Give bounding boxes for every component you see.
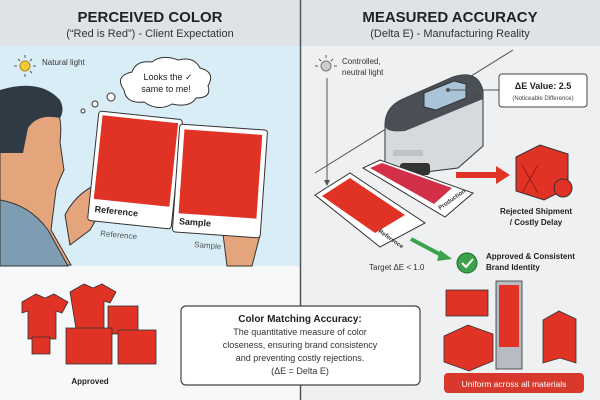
backgrounds bbox=[0, 0, 300, 400]
spectrophotometer bbox=[385, 75, 483, 176]
thought bubble: Looks the ✓ bbox=[143, 72, 193, 82]
card: sample bbox=[172, 124, 268, 238]
approved products bbox=[22, 284, 156, 386]
icon: controlled light: neutral light bbox=[342, 68, 384, 77]
arrow: light down bbox=[324, 78, 330, 186]
callout: delta E value bbox=[446, 74, 587, 107]
person bbox=[0, 86, 260, 266]
card: production sample bbox=[363, 160, 473, 217]
text: Sample bbox=[194, 240, 222, 251]
arrow: red to rejected bbox=[456, 166, 510, 184]
heading: perceived color bbox=[66, 9, 234, 40]
approved brand identity: Target ΔE < 1.0 bbox=[369, 263, 425, 272]
approved brand identity bbox=[369, 252, 575, 273]
thought bubble: same to me! bbox=[141, 84, 191, 94]
card: reference: Reference bbox=[94, 204, 139, 219]
card: reference bbox=[87, 111, 183, 229]
card: reference standard: Reference bbox=[377, 229, 405, 251]
rejected shipment bbox=[500, 145, 572, 227]
label: uniform across all materials: Uniform across all materials bbox=[462, 379, 566, 389]
callout: color matching accuracy: The quantitative measure of color bbox=[233, 327, 367, 337]
callout: color matching accuracy: Color Matching Accuracy: bbox=[238, 314, 362, 325]
approved products: Approved bbox=[71, 377, 109, 386]
brand materials bbox=[444, 281, 576, 371]
heading: measured accuracy: (Delta E) - Manufacturing Reality bbox=[370, 28, 530, 40]
card: production sample: Production bbox=[438, 188, 467, 212]
icon: controlled light bbox=[315, 55, 384, 77]
callout: color matching accuracy bbox=[181, 306, 420, 385]
rejected shipment: Rejected Shipment bbox=[500, 207, 572, 216]
heading: perceived color: (“Red is Red”) - Client Expectation bbox=[66, 28, 234, 40]
icon: sun natural light bbox=[14, 55, 85, 77]
heading: measured accuracy: MEASURED ACCURACY bbox=[362, 9, 538, 26]
label: uniform across all materials bbox=[444, 373, 584, 393]
icon: sun natural light: Natural light bbox=[42, 58, 85, 67]
icon: controlled light: Controlled, bbox=[342, 57, 381, 66]
callout: delta E value: ΔE Value: 2.5 bbox=[515, 81, 571, 91]
heading: measured accuracy bbox=[362, 9, 538, 40]
thought bubble bbox=[81, 57, 211, 113]
rejected shipment: / Costly Delay bbox=[510, 218, 563, 227]
heading: perceived color: PERCEIVED COLOR bbox=[77, 9, 223, 26]
card: sample: Sample bbox=[179, 216, 211, 228]
callout: color matching accuracy: closeness, ensuring brand consistency bbox=[223, 340, 378, 350]
callout: color matching accuracy: and preventing costly rejections. bbox=[236, 353, 364, 363]
callout: color matching accuracy: (ΔE = Delta E) bbox=[271, 366, 329, 376]
arrow: green to approved bbox=[411, 239, 452, 261]
approved brand identity: Approved & Consistent bbox=[486, 252, 575, 261]
callout: delta E value: (Noticeable Difference) bbox=[512, 96, 574, 102]
approved brand identity: Brand Identity bbox=[486, 263, 540, 272]
card: reference standard bbox=[315, 173, 425, 251]
text: Reference bbox=[100, 229, 138, 241]
